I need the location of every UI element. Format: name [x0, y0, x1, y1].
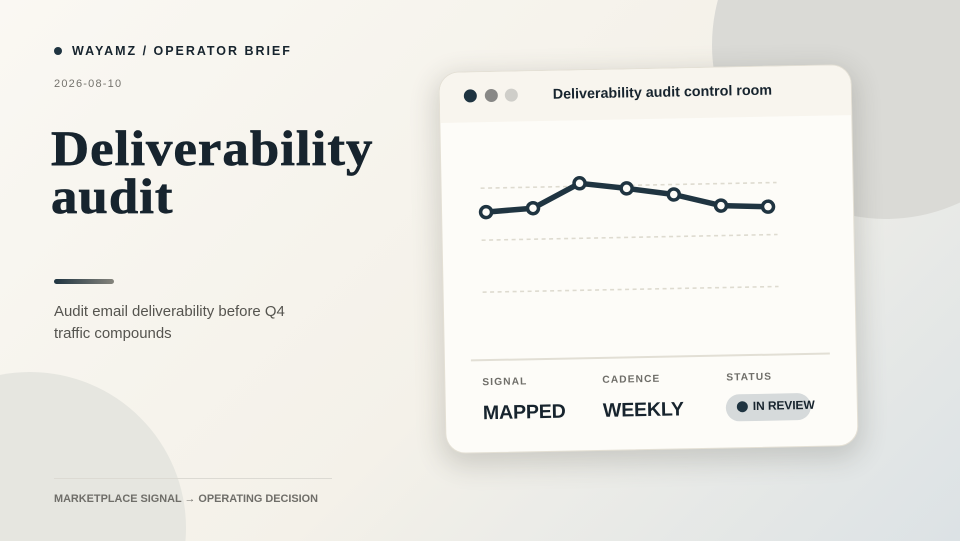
chart grid [481, 183, 779, 292]
chart line [486, 180, 768, 212]
chart markers [480, 174, 774, 218]
stats divider [471, 353, 830, 361]
icon: brand dot [54, 47, 62, 55]
cadence label: CADENCE [602, 374, 660, 386]
stat: cadence [602, 374, 684, 422]
status label: STATUS [726, 372, 772, 384]
footer text: MARKETPLACE SIGNAL → OPERATING DECISION [54, 493, 318, 505]
status text: IN REVIEW [753, 398, 815, 413]
brand text: WAYAMZ / OPERATOR BRIEF [72, 44, 292, 58]
stat: signal [482, 376, 566, 424]
accent bar [54, 279, 114, 284]
window title: Deliverability audit control room [553, 83, 772, 103]
icon: window dot mid [485, 89, 498, 102]
subtitle: Audit email deliverability before Q4 [54, 303, 285, 320]
status dot [737, 401, 748, 412]
title: Deliverability [51, 120, 373, 176]
icon: window dot dark [464, 89, 477, 103]
footer rule [54, 478, 332, 479]
panel: control room window [438, 64, 859, 454]
subtitle: traffic compounds [54, 324, 172, 342]
status pill [726, 393, 811, 422]
window header [439, 65, 851, 123]
signal value: MAPPED [483, 401, 566, 424]
title [51, 120, 373, 224]
cadence value: WEEKLY [603, 398, 684, 422]
eyebrow: brand line [54, 44, 292, 58]
stat: status [726, 372, 815, 422]
line chart [478, 176, 778, 293]
icon: window dot light [505, 88, 518, 102]
title: audit [51, 168, 174, 224]
date: 2026-08-10 [54, 78, 122, 90]
subtitle [54, 303, 285, 342]
signal label: SIGNAL [482, 376, 528, 388]
